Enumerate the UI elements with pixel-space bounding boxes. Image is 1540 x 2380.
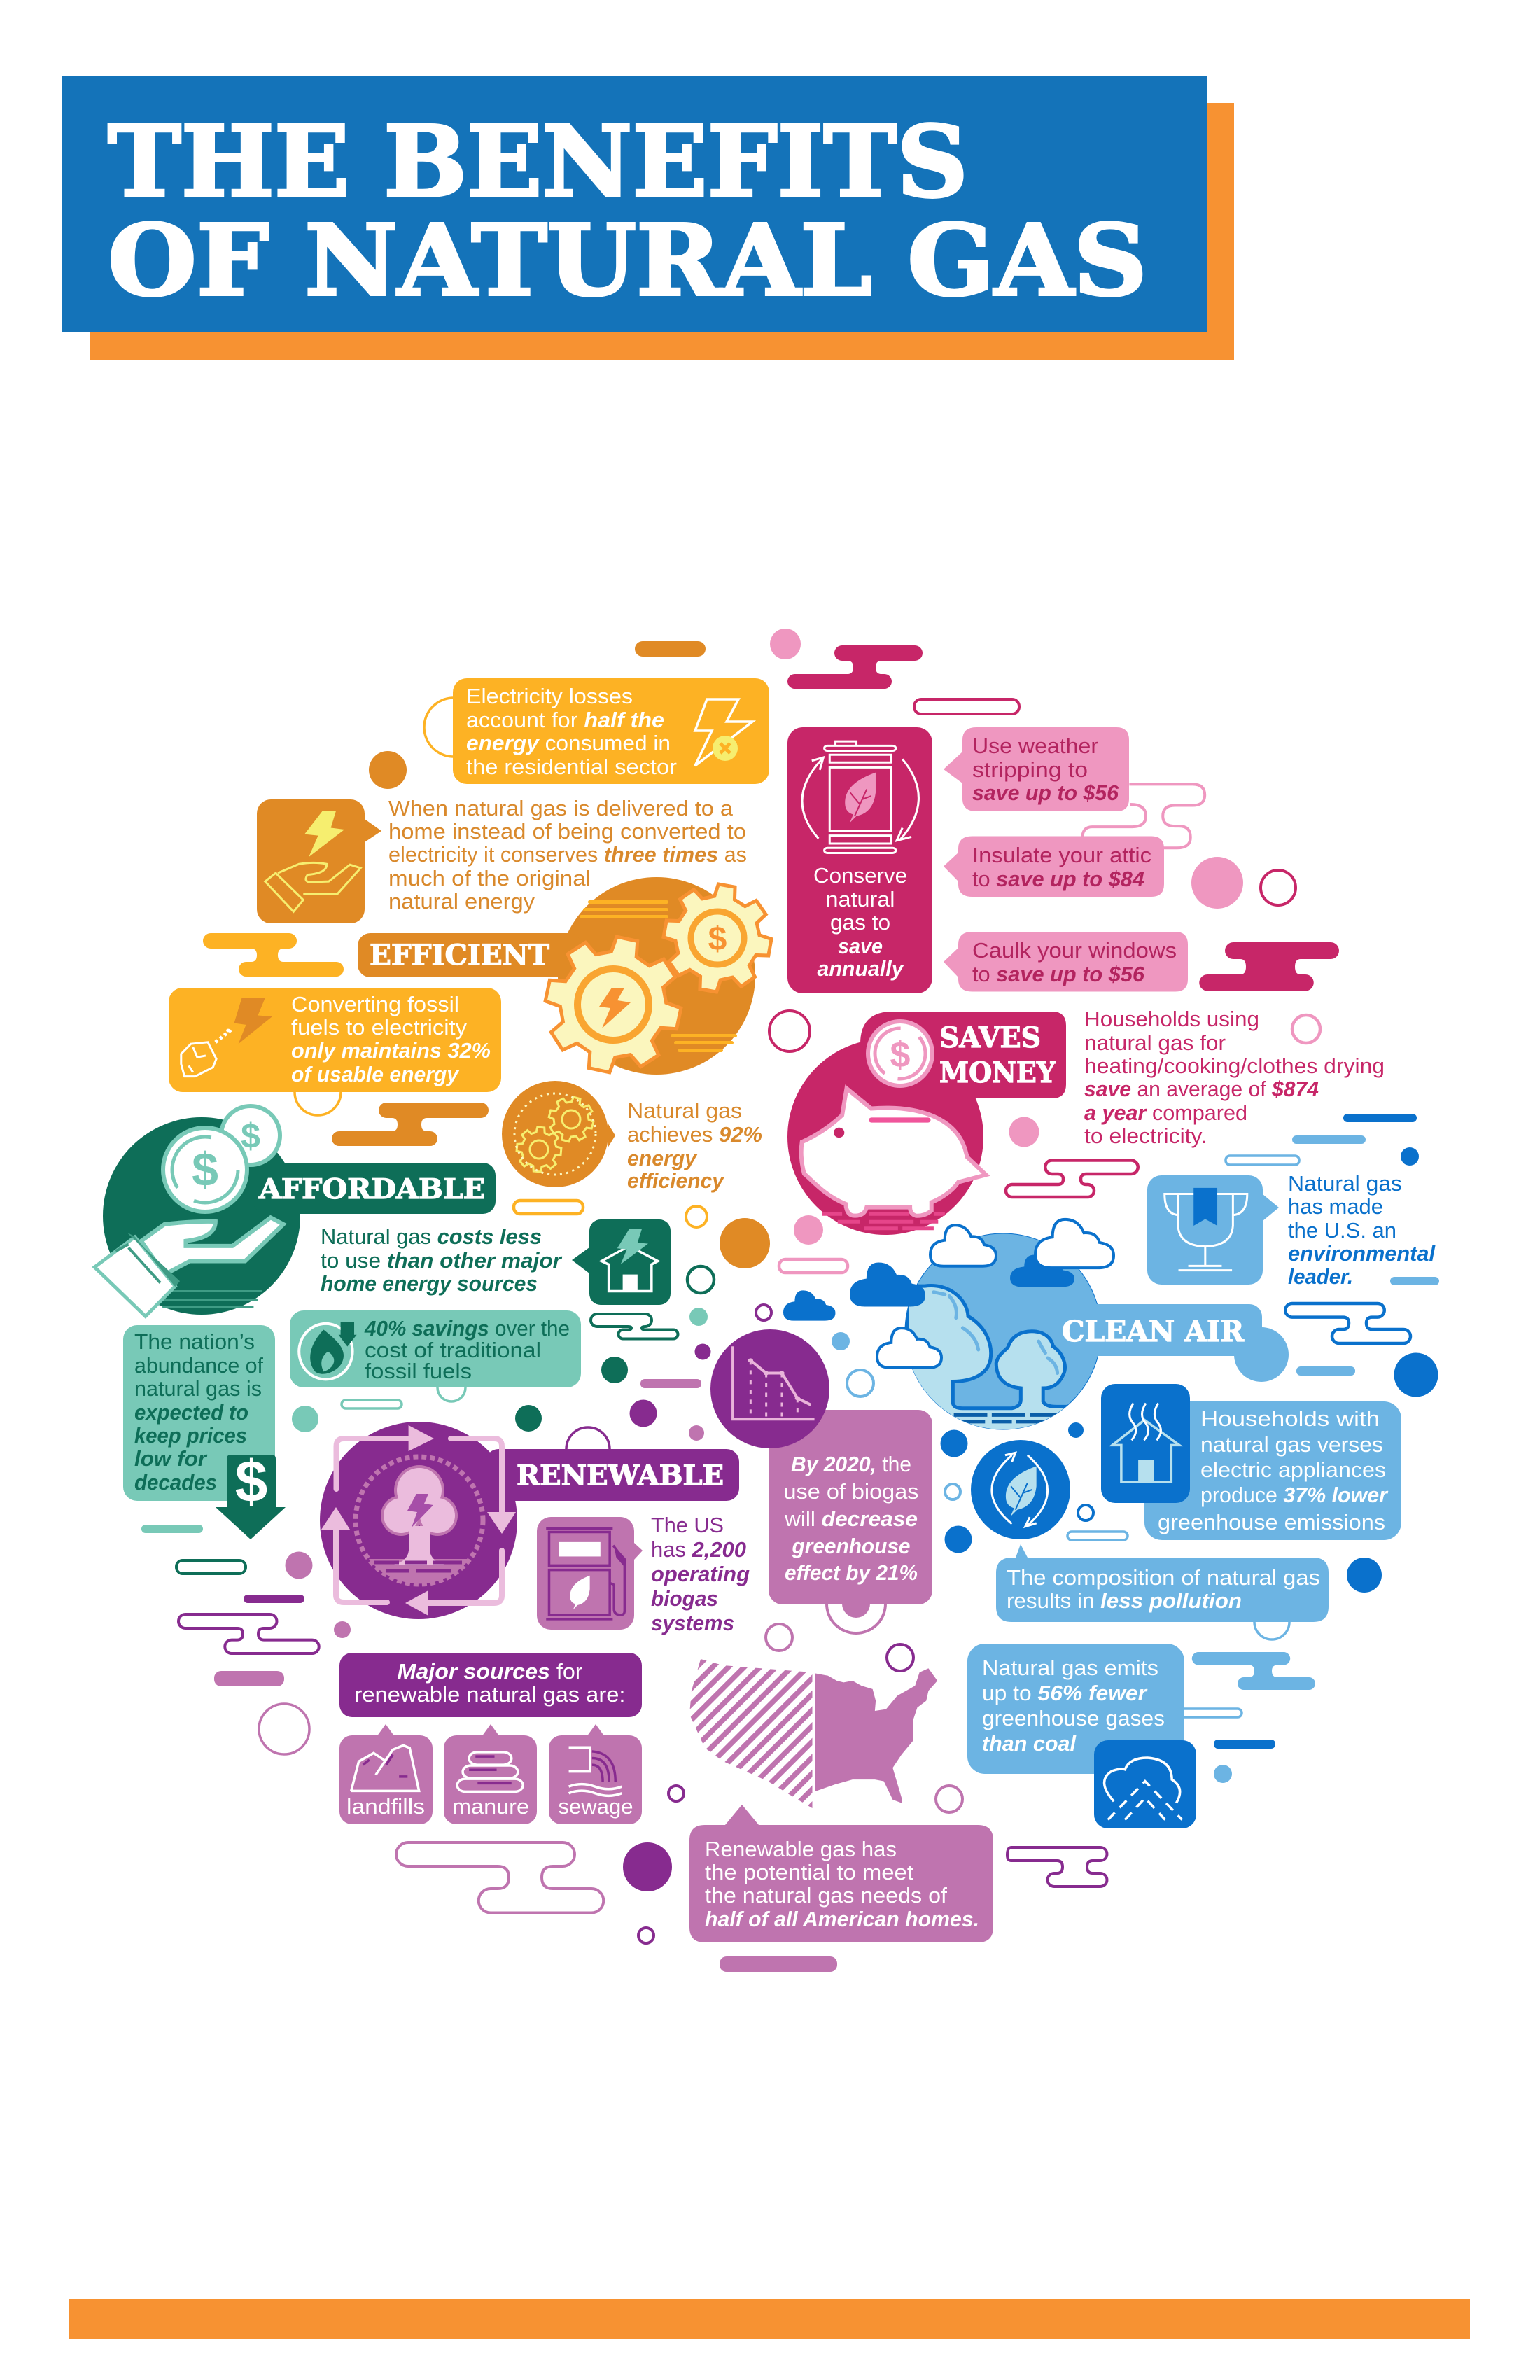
callout: renewable potential: Renewable gas has — [705, 1837, 897, 1861]
icon: clouds — [783, 1219, 1114, 1368]
decorative shapes: blue — [756, 1114, 1439, 1783]
text: environmental leader: leader. — [1288, 1264, 1353, 1289]
text: abundance: The nation’s — [134, 1329, 255, 1354]
icon: big gear — [533, 925, 693, 1084]
icon: piggy bank — [802, 1088, 986, 1228]
panel: 92 percent efficiency — [502, 1081, 762, 1193]
icon: small gear — [656, 876, 779, 1000]
text: emissions: greenhouse emissions — [1158, 1510, 1385, 1534]
icon: small coin: $ — [241, 1116, 260, 1156]
text: decrease greenhouse effect: greenhouse — [792, 1534, 910, 1558]
source: landfills: landfills — [346, 1794, 425, 1819]
text: environmental leader: Natural gas — [1288, 1171, 1402, 1196]
panel: conserve natural gas — [788, 727, 932, 993]
text: 92 percent: efficiency — [627, 1168, 725, 1193]
title text: OF NATURAL GAS — [108, 204, 1147, 318]
text: households savings: natural gas for — [1084, 1030, 1226, 1055]
text: emissions: Households with — [1200, 1406, 1380, 1431]
text: electricity losses: account for half the — [466, 708, 664, 732]
text: emissions: natural gas verses — [1200, 1432, 1383, 1457]
text: environmental leader: has made — [1288, 1194, 1383, 1219]
text: three times: electricity it conserves three times as — [388, 842, 747, 867]
icon: fuel pump — [537, 1517, 643, 1630]
callout: weather stripping: Use weather — [972, 734, 1098, 758]
decorative shapes: pink — [769, 629, 1339, 1273]
text: decrease greenhouse effect — [784, 1452, 918, 1585]
text: 92 percent: Natural gas — [627, 1098, 742, 1123]
panel: major sources: renewable natural gas are: — [354, 1682, 626, 1707]
decorative shapes: green and mint — [141, 1266, 714, 1574]
text: savings: 40% savings over the — [364, 1316, 570, 1340]
text: fewer gases: up to 56% fewer — [982, 1681, 1148, 1705]
text: decrease greenhouse effect: effect by 21% — [785, 1560, 918, 1585]
text: three times: much of the original — [388, 866, 591, 890]
text: abundance: abundance of — [134, 1353, 263, 1378]
text: converting: fuels to electricity — [291, 1015, 468, 1040]
icon: canister with leaf — [802, 741, 918, 853]
banner: saves money: MONEY — [939, 1056, 1056, 1089]
text: electricity losses — [466, 684, 677, 779]
text: converting: Converting fossil — [291, 992, 459, 1016]
section: efficient — [358, 876, 779, 1084]
text: emissions: produce 37% lower — [1200, 1483, 1389, 1507]
icon: lightning with x — [695, 699, 752, 766]
text: abundance: decades — [134, 1470, 217, 1494]
banner: affordable — [253, 1163, 496, 1214]
text: biogas: has 2,200 — [651, 1537, 746, 1562]
icon: down arrow with dollar — [216, 1448, 286, 1539]
icon: cloud with rain — [1094, 1740, 1196, 1828]
icon: big coin: $ — [192, 1143, 218, 1196]
text: biogas: The US — [651, 1513, 724, 1537]
text: conserve — [813, 863, 907, 981]
icon: house with heat — [1101, 1384, 1190, 1503]
text: fewer gases: than coal — [982, 1731, 1077, 1756]
text: abundance: keep prices — [134, 1423, 247, 1448]
panel: biogas systems — [537, 1513, 750, 1635]
callout: renewable potential: the potential to meet — [705, 1860, 913, 1884]
callout: weather stripping — [944, 727, 1129, 811]
text: three times: natural energy — [388, 889, 536, 913]
banner: saves money — [860, 1011, 1066, 1098]
text: 92 percent — [627, 1098, 762, 1193]
title banner — [62, 76, 1234, 360]
icon: flame — [299, 1322, 357, 1379]
panel: major sources — [340, 1653, 642, 1717]
icon: small gear: $ — [708, 920, 727, 958]
source: manure: manure — [452, 1794, 529, 1819]
map: united states half hatched — [690, 1659, 937, 1808]
icon: tree with lightning — [356, 1457, 483, 1584]
text: households savings: to electricity. — [1084, 1124, 1207, 1148]
icon: coal to lightning — [181, 998, 272, 1077]
text: households savings: a year compared — [1084, 1100, 1247, 1125]
text: fewer gases: greenhouse gases — [982, 1706, 1165, 1730]
text: three times: When natural gas is delivered to a — [388, 796, 734, 820]
text: three times: home instead of being converted to — [388, 819, 746, 844]
text: 92 percent: energy — [627, 1146, 698, 1170]
icon box: house — [572, 1219, 671, 1305]
text: 92 percent: achieves 92% — [627, 1122, 762, 1147]
panel: fewer greenhouse gases — [967, 1644, 1196, 1828]
text: costs less — [321, 1224, 563, 1296]
text: decrease greenhouse effect: will decrease — [784, 1506, 918, 1531]
text: decrease greenhouse effect: use of biogas — [784, 1479, 918, 1504]
text: electricity losses: energy consumed in — [466, 731, 671, 755]
text: conserve: gas to — [830, 910, 890, 934]
icon: hand with cuff — [94, 1217, 284, 1316]
text: biogas: biogas — [651, 1586, 718, 1611]
text: abundance — [134, 1329, 263, 1494]
panel: delivered natural gas — [257, 796, 747, 923]
icon: declining graph — [710, 1329, 830, 1448]
callout: renewable potential: the natural gas needs of — [705, 1883, 947, 1907]
icon: small coin — [221, 1106, 280, 1165]
callout: caulk windows: to save up to $56 — [972, 962, 1145, 986]
banner: clean air — [1062, 1304, 1289, 1382]
text: converting — [291, 992, 491, 1086]
panel: 40 percent savings — [290, 1310, 581, 1387]
section: clean air — [783, 1219, 1289, 1434]
source: sewage — [549, 1724, 642, 1824]
callout: less pollution: results in less pollution — [1007, 1588, 1242, 1613]
panel: major sources: Major sources for — [398, 1659, 582, 1684]
icon: coin — [868, 1021, 932, 1086]
text: converting: of usable energy — [291, 1062, 460, 1086]
text: biogas: systems — [651, 1611, 734, 1635]
text: conserve: annually — [818, 956, 904, 981]
panel: environmental leader — [1147, 1171, 1436, 1289]
text: electricity losses: the residential sector — [466, 755, 677, 779]
panel: graph biogas 2020 — [710, 1329, 932, 1604]
callout: weather stripping: stripping to — [972, 757, 1088, 782]
text: electricity losses: Electricity losses — [466, 684, 633, 708]
callout: weather stripping: save up to $56 — [972, 780, 1119, 805]
section: renewable — [320, 1422, 739, 1619]
icon box: hand with lightning — [257, 799, 382, 923]
banner: renewable — [486, 1449, 739, 1501]
banner: saves money: SAVES — [939, 1021, 1041, 1054]
banner: clean air: CLEAN AIR — [1062, 1315, 1245, 1348]
text: conserve: Conserve — [813, 863, 907, 888]
text: abundance: low for — [134, 1446, 208, 1471]
title text — [108, 105, 1147, 318]
icon: trophy — [1147, 1175, 1279, 1284]
banner: efficient — [358, 933, 582, 977]
callout: renewable potential — [690, 1805, 993, 1942]
text: converting: only maintains 32% — [291, 1038, 491, 1063]
text: households savings: Households using — [1084, 1007, 1259, 1031]
panel: converting fossil fuels — [169, 988, 501, 1092]
callout: insulate attic — [944, 836, 1164, 897]
icon: big coin — [163, 1128, 247, 1212]
text: costs less: home energy sources — [321, 1271, 538, 1296]
panel: nation's abundance — [123, 1325, 286, 1539]
callout: less pollution — [996, 1544, 1329, 1622]
banner: renewable: RENEWABLE — [517, 1460, 724, 1492]
source: manure — [444, 1724, 537, 1824]
text: emissions: electric appliances — [1200, 1457, 1386, 1482]
icon: down arrow with dollar: $ — [235, 1448, 267, 1514]
text: decrease greenhouse effect: By 2020, the — [791, 1452, 911, 1476]
icon: coin: $ — [890, 1035, 911, 1075]
source: landfills — [340, 1724, 433, 1824]
text: environmental leader: environmental — [1288, 1241, 1436, 1266]
text: conserve: save — [838, 934, 883, 958]
text: environmental leader: the U.S. an — [1288, 1218, 1396, 1242]
text: biogas — [651, 1513, 750, 1635]
text: environmental leader — [1288, 1171, 1436, 1289]
text: savings: fossil fuels — [365, 1359, 472, 1383]
text: abundance: expected to — [134, 1400, 248, 1424]
callout: caulk windows: Caulk your windows — [972, 938, 1177, 962]
callout: renewable potential: half of all American homes. — [705, 1907, 979, 1931]
text: fewer gases — [982, 1656, 1165, 1756]
text: conserve: natural — [826, 887, 895, 911]
decorative shapes: purple and mauve — [178, 1344, 1107, 1972]
callout: insulate attic: to save up to $84 — [972, 867, 1144, 891]
icon: cycle arrows — [321, 1425, 516, 1616]
text: abundance: natural gas is — [134, 1376, 262, 1401]
icon: gears in circle — [502, 1081, 615, 1187]
text: biogas: operating — [651, 1562, 750, 1586]
title text: THE BENEFITS — [108, 105, 968, 220]
footer bar — [69, 2300, 1470, 2339]
text: three times — [388, 796, 747, 913]
decorative shapes: orange and yellow — [203, 641, 770, 1268]
panel: households emissions — [1101, 1384, 1401, 1540]
text: households savings: heating/cooking/clothes drying — [1084, 1054, 1385, 1078]
text: emissions — [1158, 1406, 1389, 1534]
text: savings: cost of traditional — [365, 1338, 541, 1362]
text: households savings — [1084, 1007, 1385, 1148]
callout: caulk windows — [944, 932, 1188, 991]
section: affordable — [94, 1106, 671, 1316]
text: households savings: save an average of $874 — [1084, 1077, 1319, 1101]
text: savings — [364, 1316, 570, 1383]
callout: less pollution: The composition of natural gas — [1007, 1565, 1320, 1590]
source: sewage: sewage — [559, 1794, 633, 1819]
icon: trees — [907, 1285, 1084, 1434]
banner: efficient: EFFICIENT — [370, 939, 550, 972]
banner: affordable: AFFORDABLE — [258, 1173, 485, 1205]
text: fewer gases: Natural gas emits — [982, 1656, 1158, 1680]
text: costs less: to use than other major — [321, 1248, 563, 1273]
callout: insulate attic: Insulate your attic — [972, 843, 1152, 867]
text: costs less: Natural gas costs less — [321, 1224, 542, 1249]
icon: leaf in circle — [971, 1440, 1070, 1539]
section: saves money — [788, 1007, 1385, 1235]
panel: electricity losses — [453, 678, 769, 784]
